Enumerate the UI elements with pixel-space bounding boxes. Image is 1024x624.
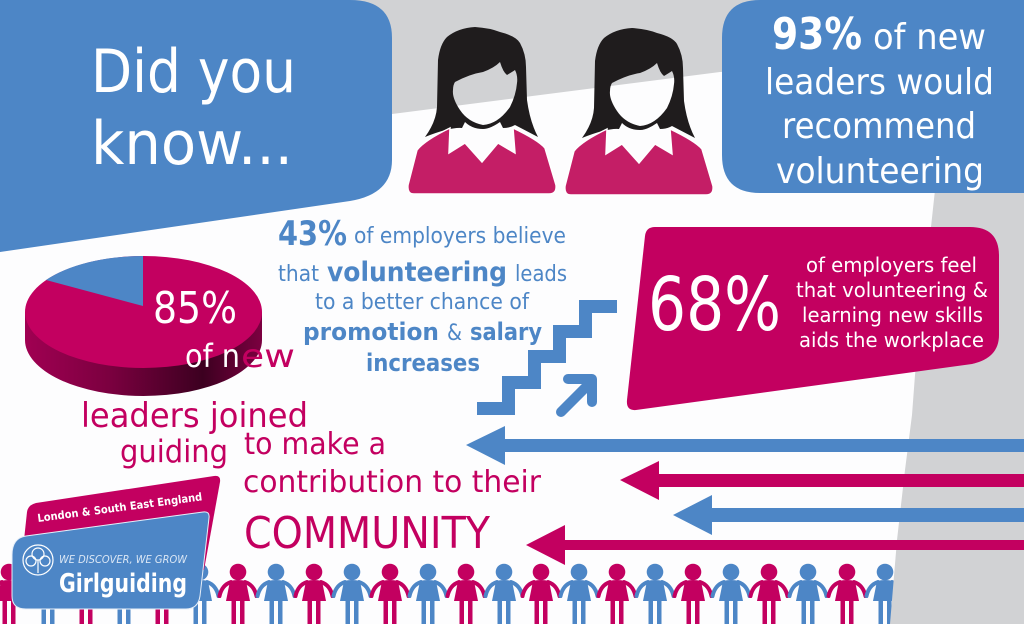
heading: did you know [91,37,296,179]
text: of new leaders joined guiding [81,337,308,470]
logo: girlguiding [12,476,220,609]
text: 43 percent of employers: volunteering [327,257,507,288]
text: 43 percent of employers: to a better chance of [315,290,530,315]
text: of new leaders joined guiding: of n [185,337,240,375]
logo plate [12,512,209,609]
icon: staircase [477,300,617,415]
text: employers feel: learning new skills [802,303,983,327]
text: 93 percent of new leaders: volunteering [776,151,984,192]
text: of new leaders joined guiding: ew [241,337,295,375]
text: 43 percent of employers: 43% [278,214,347,254]
icon: up arrow [561,379,592,412]
heading: did you know: know... [91,109,293,179]
text: 93 percent of new leaders: of new [873,17,986,58]
text: employers feel: that volunteering & [796,278,988,302]
logo tab: london and south east: London & South East England [37,490,203,525]
text: to make a contribution: COMMUNITY [244,508,490,559]
heading: did you know: Did you [91,37,296,107]
text: to make a contribution: to make a [244,427,386,462]
text: 93 percent of new leaders: leaders would [765,62,994,103]
arrow: blue long [466,426,1024,465]
text: 43 percent of employers: increases [366,349,480,377]
text: 93 percent of new leaders: 93% [772,9,862,60]
pie slice: 15 percent [46,256,143,306]
text: of new leaders joined guiding: guiding [120,434,228,470]
row of people [0,564,904,624]
arrow: pink lower [526,525,1024,565]
text: of new leaders joined guiding: leaders joined [81,396,308,436]
text: 43 percent of employers: leads [515,262,567,287]
arrow: pink upper [620,461,1024,500]
text: 43 percent of employers: salary [470,318,542,346]
text: employers feel: of employers feel [806,253,977,277]
text: tagline: WE DISCOVER, WE GROW [59,553,188,566]
text: girlguiding: Girlguiding [59,569,187,599]
text: employers feel: aids the workplace [799,328,984,352]
text: 93 percent of new leaders: recommend [782,106,976,147]
text: 43 percent of employers: & [447,321,462,346]
text: to make a contribution [243,427,542,559]
pie chart [25,256,262,396]
number: 68 percent: 68% [648,262,781,348]
text: employers feel [796,253,988,352]
text: 43 percent of employers: of employers believe [354,224,566,249]
text: 43 percent of employers: that [278,262,319,287]
panel: 68 percent [627,227,999,410]
panel: did you know [0,0,392,252]
icon: two women [408,27,713,195]
text: 93 percent of new leaders [765,9,994,192]
icon: trefoil [23,545,53,575]
logo tab: london and south east [24,476,220,570]
arrow: blue short [673,495,1024,535]
panel: 93 percent [722,0,1024,193]
number: 85 percent: 85% [153,283,237,334]
text: to make a contribution: contribution to their [243,465,542,500]
text: 43 percent of employers [278,214,567,377]
text: 43 percent of employers: promotion [303,318,439,346]
